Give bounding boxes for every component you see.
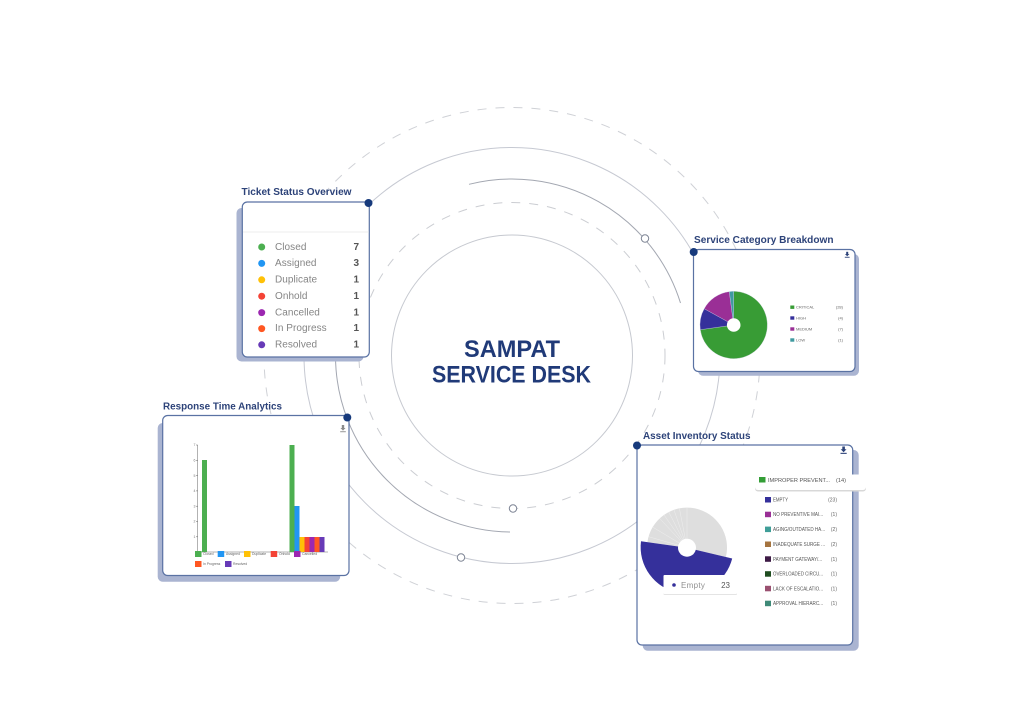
chart legend: Assigned bbox=[226, 552, 240, 556]
chart legend: Cancelled bbox=[302, 552, 317, 556]
heading: service category: Service Category Breakdown bbox=[694, 234, 834, 246]
highlighted legend row: (14) bbox=[836, 478, 846, 484]
panel: asset inventory status bbox=[633, 430, 866, 651]
status list: Assigned bbox=[275, 258, 317, 269]
panel: service category breakdown bbox=[690, 234, 859, 376]
status list: 1 bbox=[353, 323, 359, 334]
legend: asset issues: NO PREVENTIVE MAI... bbox=[773, 512, 823, 518]
card: ticket status bbox=[242, 202, 369, 357]
bar chart: 1 bbox=[194, 535, 196, 539]
chart legend: Onhold bbox=[279, 552, 290, 556]
icon: download bbox=[340, 425, 346, 432]
legend: asset issues: PAYMENT GATEWAY/... bbox=[773, 557, 822, 563]
tooltip: empty bbox=[664, 575, 737, 595]
legend: service categories: CRITICAL bbox=[796, 304, 815, 310]
ring marker: bottom centre bbox=[509, 505, 517, 512]
card shadow: response time bbox=[158, 423, 340, 582]
status list: In Progress bbox=[275, 323, 327, 334]
chart legend: Duplicate bbox=[252, 552, 266, 556]
legend: asset issues: OVERLOADED CIRCU... bbox=[773, 572, 823, 578]
bar chart: 4 bbox=[194, 489, 196, 493]
status list: 7 bbox=[353, 242, 359, 253]
chart legend: Resolved bbox=[233, 562, 247, 566]
panel: response time analytics bbox=[158, 400, 351, 582]
legend: asset issues: (2) bbox=[831, 542, 837, 548]
ring marker: upper right bbox=[641, 235, 649, 242]
legend: service categories: HIGH bbox=[796, 315, 806, 320]
bar chart: 6 bbox=[194, 458, 196, 462]
chart legend: In Progress bbox=[203, 562, 221, 566]
status list: 1 bbox=[353, 291, 359, 302]
icon: download bbox=[845, 252, 850, 258]
pie chart: asset inventory bbox=[641, 508, 732, 594]
card: response time bbox=[163, 416, 349, 576]
status list: Resolved bbox=[275, 339, 317, 350]
anchor dot: ticket status bbox=[364, 199, 372, 207]
title: SAMPAT bbox=[464, 336, 560, 363]
heading: response time: Response Time Analytics bbox=[163, 400, 282, 412]
title bbox=[432, 336, 592, 388]
status list: Closed bbox=[275, 242, 306, 253]
concentric rings background bbox=[264, 108, 760, 604]
legend: service categories: MEDIUM bbox=[796, 326, 812, 331]
tooltip: empty: 23 bbox=[721, 581, 731, 590]
legend: asset issues: LACK OF ESCALATIO... bbox=[773, 586, 823, 592]
status list: 1 bbox=[353, 275, 359, 286]
legend: service categories bbox=[790, 304, 844, 342]
panel: ticket status overview bbox=[236, 186, 372, 362]
legend: asset issues: APPROVAL HIERARC... bbox=[773, 601, 823, 607]
card shadow: ticket status bbox=[236, 208, 364, 362]
legend: asset issues: (1) bbox=[831, 572, 837, 578]
bar chart bbox=[194, 443, 328, 552]
anchor dot: asset inventory bbox=[633, 442, 641, 450]
legend: asset issues: (1) bbox=[831, 557, 837, 563]
legend: asset issues: (23) bbox=[828, 498, 837, 504]
chart legend bbox=[195, 551, 317, 567]
pie chart: service categories bbox=[700, 291, 767, 359]
heading: asset inventory: Asset Inventory Status bbox=[643, 430, 751, 442]
legend: service categories: LOW bbox=[796, 337, 805, 342]
anchor dot: service category bbox=[690, 248, 698, 256]
card shadow: asset inventory bbox=[643, 450, 859, 651]
legend: asset issues: INADEQUATE SURGE ... bbox=[773, 542, 825, 548]
bar chart: 7 bbox=[194, 443, 196, 447]
legend: asset issues: (2) bbox=[831, 527, 837, 533]
status list: 1 bbox=[353, 307, 359, 318]
status list: Duplicate bbox=[275, 275, 318, 286]
highlighted legend row bbox=[755, 474, 866, 492]
bar chart: 3 bbox=[194, 504, 196, 508]
legend: asset issues: EMPTY bbox=[773, 498, 789, 504]
anchor dot: response time bbox=[343, 414, 351, 422]
card: asset inventory bbox=[637, 445, 853, 645]
legend: asset issues: (1) bbox=[831, 586, 837, 592]
card shadow: service category bbox=[698, 254, 859, 376]
legend: asset issues: (1) bbox=[831, 601, 837, 607]
icon: download bbox=[840, 446, 847, 454]
legend: service categories: (1) bbox=[838, 337, 844, 342]
legend: asset issues: AGING/OUTDATED HA... bbox=[773, 527, 825, 533]
legend: asset issues bbox=[765, 497, 837, 607]
status list: 1 bbox=[353, 339, 359, 350]
legend: asset issues: (1) bbox=[831, 512, 837, 518]
status list: Cancelled bbox=[275, 307, 320, 318]
bar chart: 5 bbox=[194, 474, 196, 478]
ring marker: lower left bbox=[457, 554, 465, 561]
legend: service categories: (4) bbox=[838, 315, 844, 320]
highlighted legend row: IMPROPER PREVENT... bbox=[768, 478, 830, 484]
status list: 3 bbox=[353, 258, 359, 269]
legend: service categories: (28) bbox=[836, 304, 844, 310]
bar chart: 2 bbox=[194, 520, 196, 524]
chart legend: Closed bbox=[203, 552, 214, 556]
card: service category bbox=[694, 250, 855, 372]
title: SERVICE DESK bbox=[432, 362, 592, 388]
heading: ticket status: Ticket Status Overview bbox=[242, 186, 352, 198]
legend: service categories: (7) bbox=[838, 326, 844, 331]
status list: Onhold bbox=[275, 291, 308, 302]
tooltip: empty: Empty bbox=[681, 581, 705, 590]
status list bbox=[258, 242, 359, 350]
